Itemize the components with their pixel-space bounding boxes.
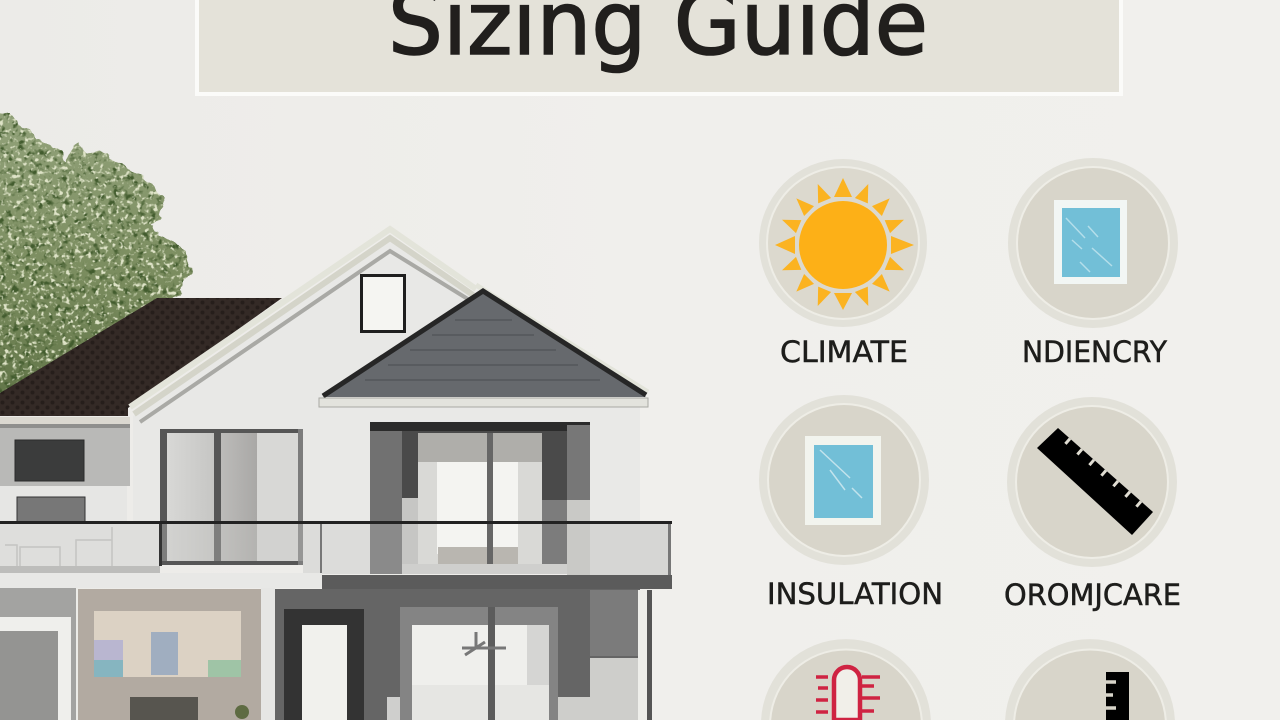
icon: ruler vertical [1005, 639, 1175, 720]
label: climate: CLIMATE [780, 335, 908, 369]
sliding window left [160, 429, 303, 565]
upper gable wall [133, 240, 478, 522]
icon: ruler diagonal [1007, 397, 1177, 567]
gable fascia under-band [134, 238, 473, 414]
balcony rail [0, 521, 672, 524]
left upper wing [0, 417, 130, 523]
house illustration [0, 229, 672, 720]
dark hip roof [0, 298, 282, 416]
attic window [362, 276, 404, 332]
icon: thermometer [761, 639, 931, 720]
icon: insulation window [759, 395, 929, 565]
front gable [319, 285, 648, 407]
gable shadow [140, 251, 471, 422]
soffit [319, 398, 648, 407]
title banner [197, 0, 1121, 94]
tree [0, 114, 190, 410]
right wall [320, 406, 640, 523]
icon: climate sun [759, 159, 927, 327]
ground floor [0, 588, 652, 720]
balcony glass [0, 522, 671, 576]
balcony slab [0, 573, 672, 589]
label: insulation: INSULATION [767, 577, 943, 611]
downpipe [647, 590, 652, 720]
label: efficiency: NDIENCRY [1022, 335, 1167, 369]
gable fascia [130, 229, 476, 407]
icon: window efficiency [1008, 158, 1178, 328]
label: oromucare: OROMJCARE [1004, 578, 1181, 612]
balcony door [370, 422, 590, 575]
